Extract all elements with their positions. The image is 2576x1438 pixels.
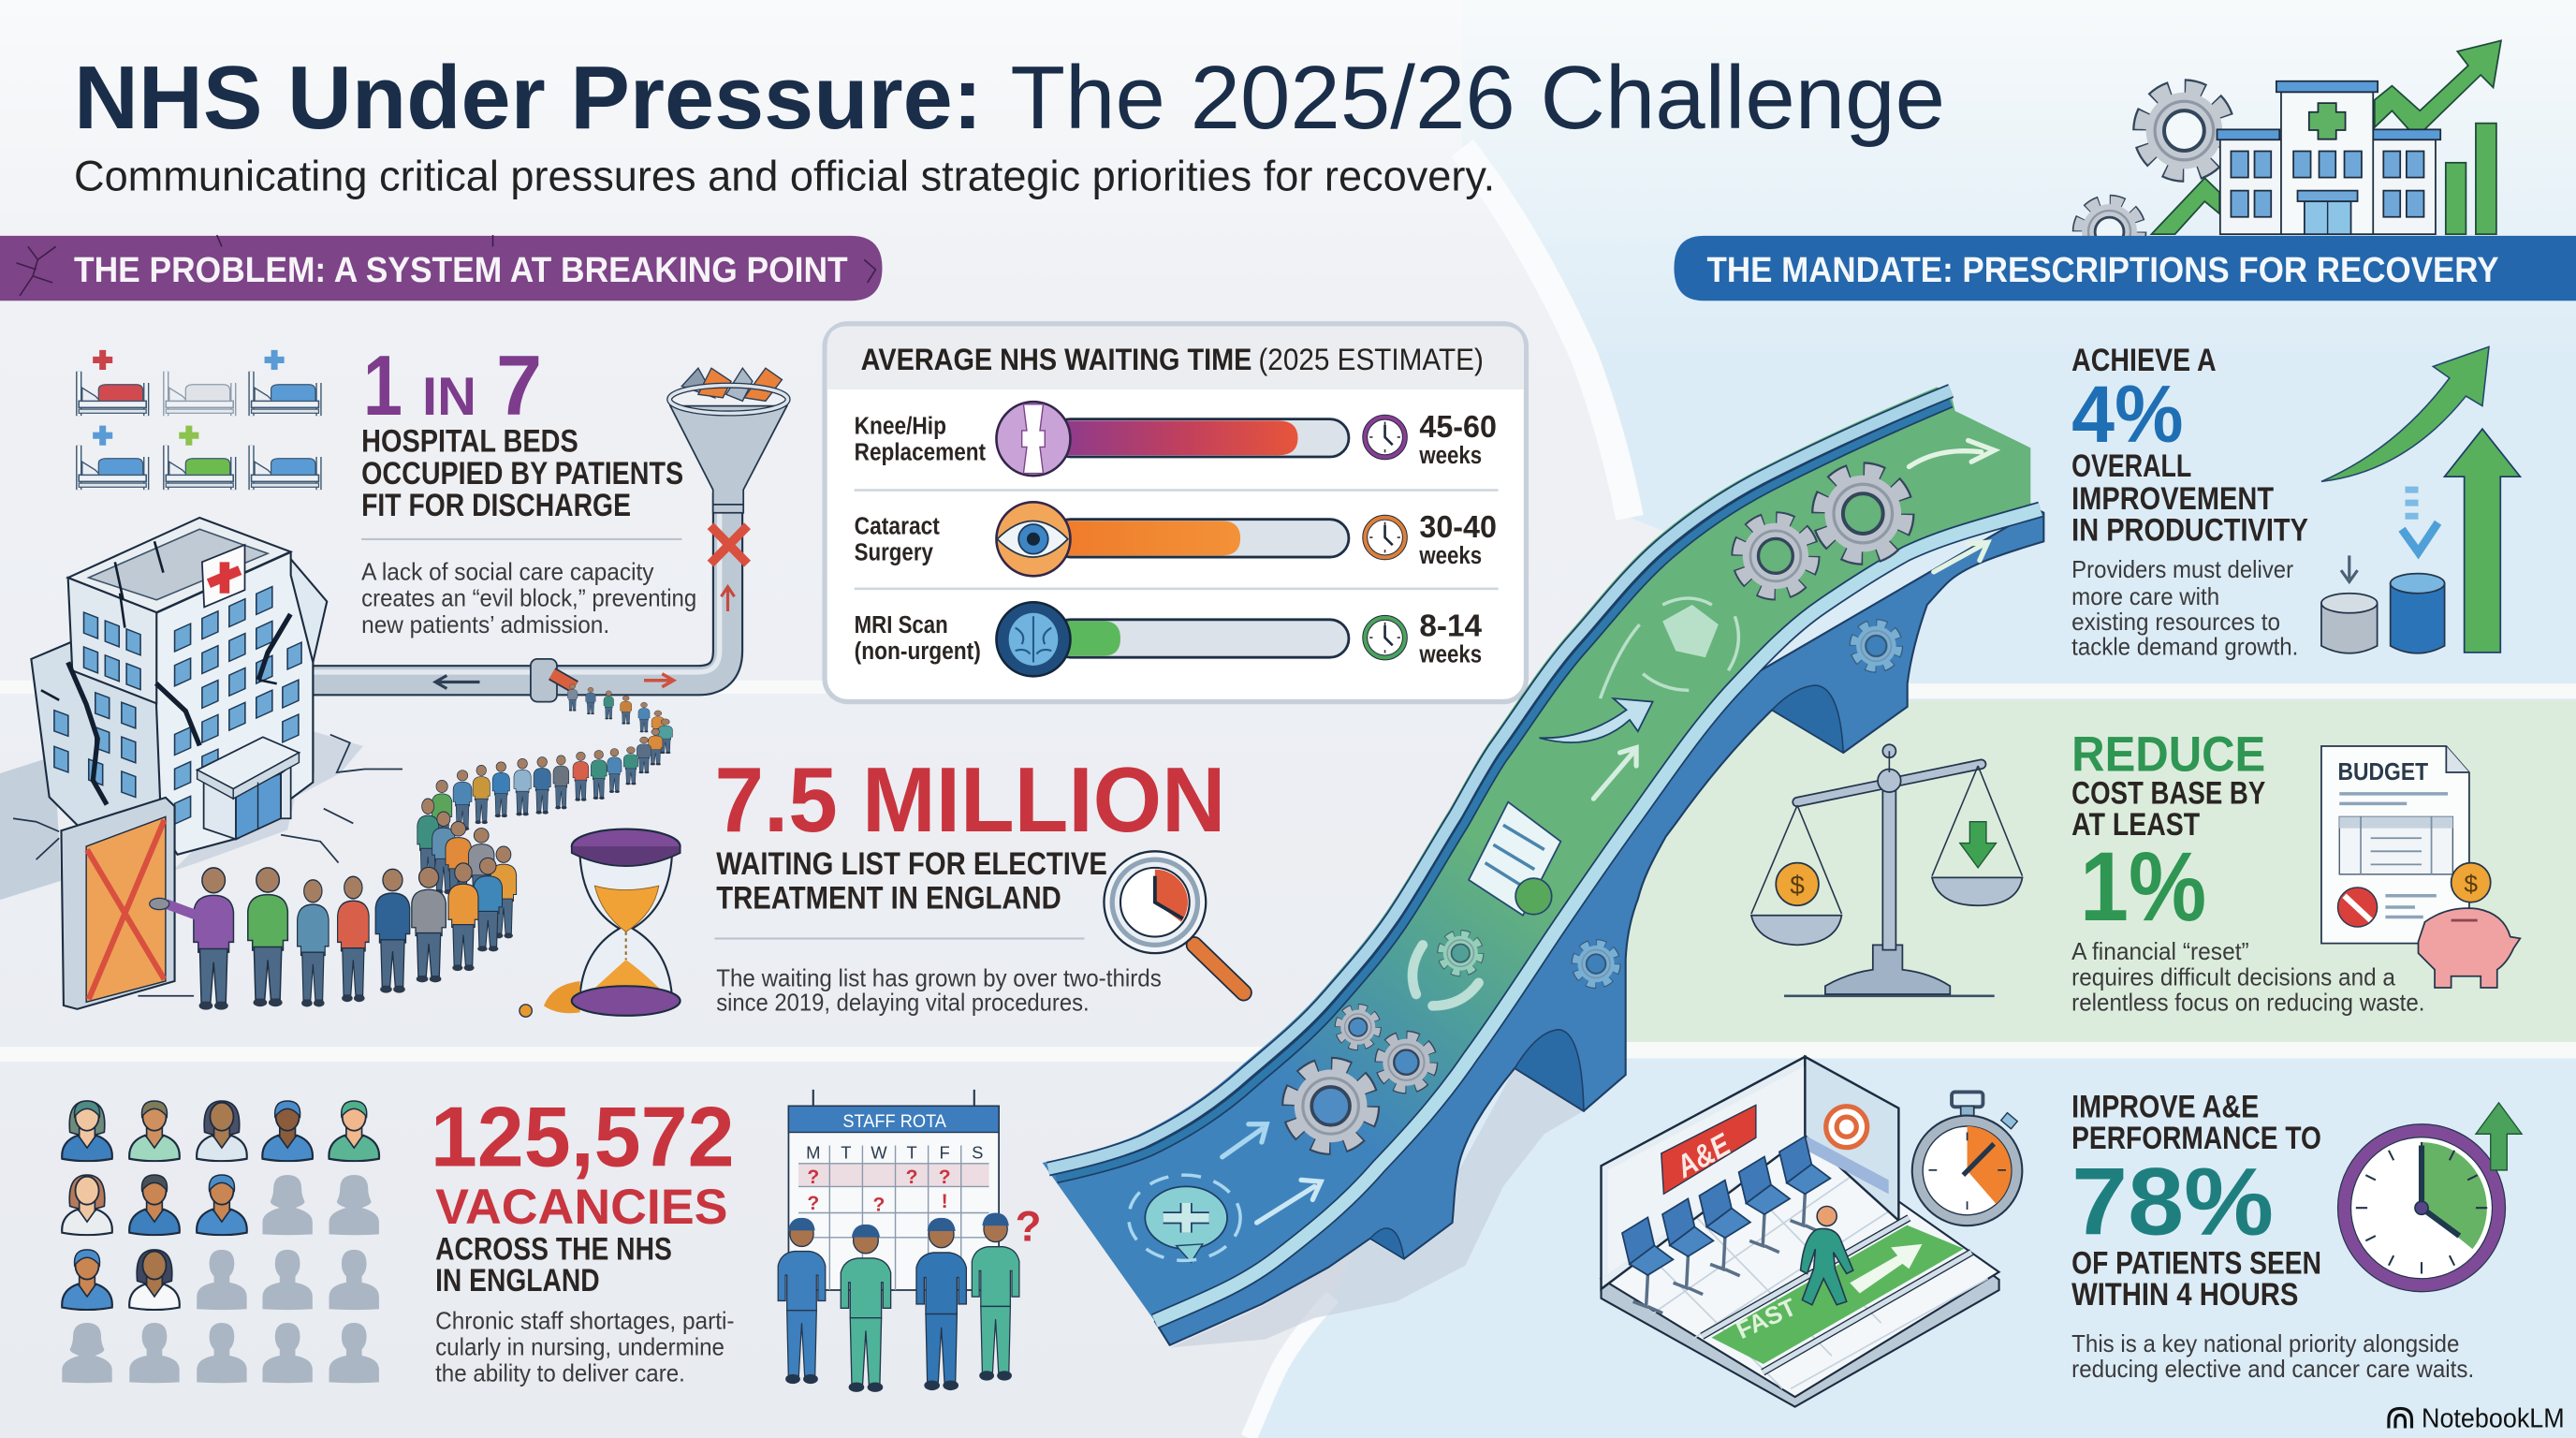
shadow under bridge — [1170, 1068, 1584, 1347]
stat: 7.5 million: 7.5 MILLION — [714, 748, 1225, 851]
illustration: isometric A&E waiting room: A&E — [1670, 1127, 1737, 1185]
title: The 2025/26 Challenge — [1010, 48, 1945, 148]
stat: reduce cost base 1%: REDUCE — [2071, 726, 2265, 782]
illustration: isometric A&E waiting room — [1602, 1057, 1999, 1407]
stat: improve A&E 78%: This is a key national priority alongside — [2071, 1331, 2459, 1357]
stat: reduce cost base 1%: COST BASE BY — [2071, 775, 2265, 811]
icon: staff rota calendar: T — [906, 1143, 917, 1163]
stat: reduce cost base 1%: AT LEAST — [2071, 807, 2200, 843]
stat: 1 in 7 — [361, 338, 696, 638]
subtitle: Communicating critical pressures and official strategic priorities for recovery. — [74, 153, 1495, 200]
stat: reduce cost base 1% — [2071, 726, 2425, 1017]
stat: 1 in 7: A lack of social care capacity — [361, 560, 654, 586]
logo: NotebookLM: NotebookLM — [2422, 1404, 2565, 1434]
icon: hourglass — [520, 829, 681, 1017]
panel: green cost panel — [1618, 700, 2576, 1042]
stat: 125,572 vacancies: VACANCIES — [435, 1180, 728, 1235]
icon: staff rota calendar: F — [940, 1143, 950, 1163]
stat: improve A&E 78%: IMPROVE A&E — [2071, 1090, 2259, 1125]
bar row: MRI scan: (non-urgent) — [855, 637, 981, 665]
background: left problem side — [0, 0, 1808, 1438]
stat: improve A&E 78%: reducing elective and cancer care waits. — [2071, 1357, 2474, 1383]
stat: 7.5 million — [714, 748, 1225, 1017]
chart card: average NHS waiting time — [825, 324, 1526, 702]
stat: reduce cost base 1%: relentless focus on reducing waste. — [2071, 990, 2425, 1017]
stat: improve A&E 78% — [2071, 1090, 2474, 1383]
stat: 7.5 million: TREATMENT IN ENGLAND — [716, 881, 1061, 917]
icon: chat bubble with cross — [1129, 1175, 1240, 1262]
icon: staff rota calendar: ? — [906, 1167, 918, 1188]
stat: 1 in 7: OCCUPIED BY PATIENTS — [361, 456, 683, 492]
icon: staff rota calendar: T — [841, 1143, 852, 1163]
title — [74, 48, 1945, 148]
icon: staff rota calendar: ? — [807, 1167, 819, 1188]
stat: 4% productivity: more care with — [2071, 584, 2219, 610]
icon: approved badge — [1515, 878, 1552, 915]
stat: 7.5 million: The waiting list has grown by over two-thirds — [716, 965, 1162, 991]
stat: 4% productivity: Providers must deliver — [2071, 557, 2294, 583]
bar row: MRI scan: MRI Scan — [855, 610, 948, 638]
illustration: patient queue — [150, 684, 672, 1010]
icon: staff rota calendar: W — [871, 1143, 887, 1163]
banner: the mandate: THE MANDATE: PRESCRIPTIONS FOR RECOVERY — [1707, 250, 2499, 289]
icon: staff rota calendar — [778, 1090, 1042, 1392]
icon: budget document and piggy bank: $ — [2464, 870, 2478, 898]
icon: pale gears and care symbols — [1412, 598, 1898, 1005]
stat: 7.5 million: WAITING LIST FOR ELECTIVE — [716, 846, 1107, 882]
icon: recovering hospital with gears and growth arrow — [2079, 40, 2501, 262]
stat: 1 in 7: IN — [422, 367, 476, 427]
arrows on deck — [1222, 440, 1995, 1223]
stat: 7.5 million: since 2019, delaying vital procedures. — [716, 990, 1090, 1017]
bar row: knee/hip replacement: 45-60 — [1419, 410, 1497, 445]
bar row: cataract surgery: Cataract — [855, 512, 940, 540]
icon: magnifier with clock — [1104, 851, 1244, 992]
stat: improve A&E 78%: WITHIN 4 HOURS — [2071, 1277, 2298, 1313]
title: NHS Under Pressure: — [74, 48, 983, 148]
stat: 1 in 7: new patients’ admission. — [361, 612, 609, 638]
icon: staff rota calendar: M — [806, 1143, 820, 1163]
icon: hospital beds grid — [79, 350, 318, 490]
icon: staff rota calendar: STAFF ROTA — [842, 1112, 946, 1132]
stat: 4% productivity: OVERALL — [2071, 448, 2191, 484]
stat: 125,572 vacancies: cularly in nursing, undermine — [435, 1334, 724, 1360]
background: right mandate side — [1253, 0, 2576, 1438]
banner: the problem: THE PROBLEM: A SYSTEM AT BREAKING POINT — [74, 250, 848, 289]
bar row: MRI scan: 8-14 — [1419, 609, 1483, 643]
icon: staff rota calendar: ? — [807, 1193, 819, 1214]
stat: improve A&E 78%: OF PATIENTS SEEN — [2071, 1245, 2321, 1281]
bar row: MRI scan — [855, 602, 1483, 676]
bar row: cataract surgery: weeks — [1419, 541, 1482, 569]
arrow: large blue curved — [1540, 698, 1653, 742]
bar row: MRI scan: weeks — [1419, 639, 1482, 668]
divider curve — [1249, 148, 1630, 1438]
stat: 1 in 7: HOSPITAL BEDS — [361, 424, 578, 460]
stat: 125,572 vacancies: ACROSS THE NHS — [435, 1232, 672, 1268]
stat: 4% productivity: existing resources to — [2071, 609, 2280, 636]
icon: balance scale — [1751, 744, 2023, 996]
icon: funnel and blocked pipe — [309, 368, 788, 702]
icon: staff rota calendar: ? — [939, 1167, 951, 1188]
icon: barricaded door — [61, 798, 175, 1009]
icon: staff rota calendar: S — [972, 1143, 983, 1163]
staff grid: filled and vacant posts — [62, 1101, 379, 1383]
bar row: cataract surgery — [855, 502, 1497, 576]
stat: reduce cost base 1%: A financial “reset” — [2071, 939, 2249, 965]
icon: gears on deck — [1291, 472, 1905, 1146]
stat: 1 in 7: FIT FOR DISCHARGE — [361, 488, 631, 523]
stat: 4% productivity: tackle demand growth. — [2071, 635, 2298, 661]
illustration: recovery bridge — [1043, 387, 2043, 1345]
stat: 125,572 vacancies: Chronic staff shortages, parti- — [435, 1308, 735, 1334]
icon: budget document and piggy bank — [2321, 746, 2520, 988]
chart card: average NHS waiting time: AVERAGE NHS WAITING TIME — [861, 343, 1251, 376]
icon: cracked hospital — [0, 518, 402, 996]
stat: 125,572 vacancies: IN ENGLAND — [435, 1263, 600, 1299]
stat: reduce cost base 1%: 1% — [2080, 832, 2206, 942]
stat: 1 in 7: 7 — [496, 338, 542, 433]
stat: 4% productivity — [2071, 343, 2308, 661]
bar row: knee/hip replacement: Replacement — [855, 438, 986, 466]
stat: 125,572 vacancies: the ability to deliver care. — [435, 1360, 685, 1387]
icon: staff rota calendar: ? — [1016, 1202, 1042, 1250]
bar row: knee/hip replacement: Knee/Hip — [855, 411, 946, 439]
stat: improve A&E 78%: 78% — [2071, 1148, 2274, 1255]
banner: the problem — [0, 235, 882, 301]
banner: the mandate — [1674, 236, 2576, 301]
stat: 4% productivity: IMPROVEMENT — [2071, 481, 2274, 517]
stat: 4% productivity: ACHIEVE A — [2071, 343, 2217, 378]
icon: checklist document — [1469, 802, 1560, 916]
stat: 4% productivity: IN PRODUCTIVITY — [2071, 513, 2308, 549]
stat: 1 in 7: 1 — [363, 338, 402, 433]
stat: reduce cost base 1%: requires difficult decisions and a — [2071, 964, 2396, 990]
icon: productivity arrows and cylinders — [2321, 346, 2520, 653]
panel: row separators — [0, 681, 2576, 1062]
stat: 4% productivity: 4% — [2071, 370, 2184, 460]
icon: budget document and piggy bank: BUDGET — [2338, 759, 2428, 785]
chart card: average NHS waiting time: (2025 ESTIMATE) — [1258, 343, 1484, 376]
icon: four hour clock with up arrow — [2338, 1103, 2522, 1292]
icon: balance scale: $ — [1790, 871, 1805, 900]
illustration: isometric A&E waiting room: FAST — [1732, 1293, 1800, 1344]
stat: 1 in 7: creates an “evil block,” preventing — [361, 586, 696, 612]
bar row: knee/hip replacement: weeks — [1419, 441, 1482, 469]
icon: stopwatch — [1912, 1092, 2022, 1225]
bar row: cataract surgery: 30-40 — [1419, 510, 1497, 545]
icon: staff rota calendar: ? — [873, 1195, 885, 1216]
stat: improve A&E 78%: PERFORMANCE TO — [2071, 1121, 2321, 1156]
stat: 125,572 vacancies: 125,572 — [431, 1089, 735, 1184]
icon: staff rota calendar: ! — [942, 1191, 948, 1212]
bar row: cataract surgery: Surgery — [855, 538, 933, 566]
stat: 125,572 vacancies — [431, 1089, 735, 1387]
bar row: knee/hip replacement — [855, 402, 1497, 476]
